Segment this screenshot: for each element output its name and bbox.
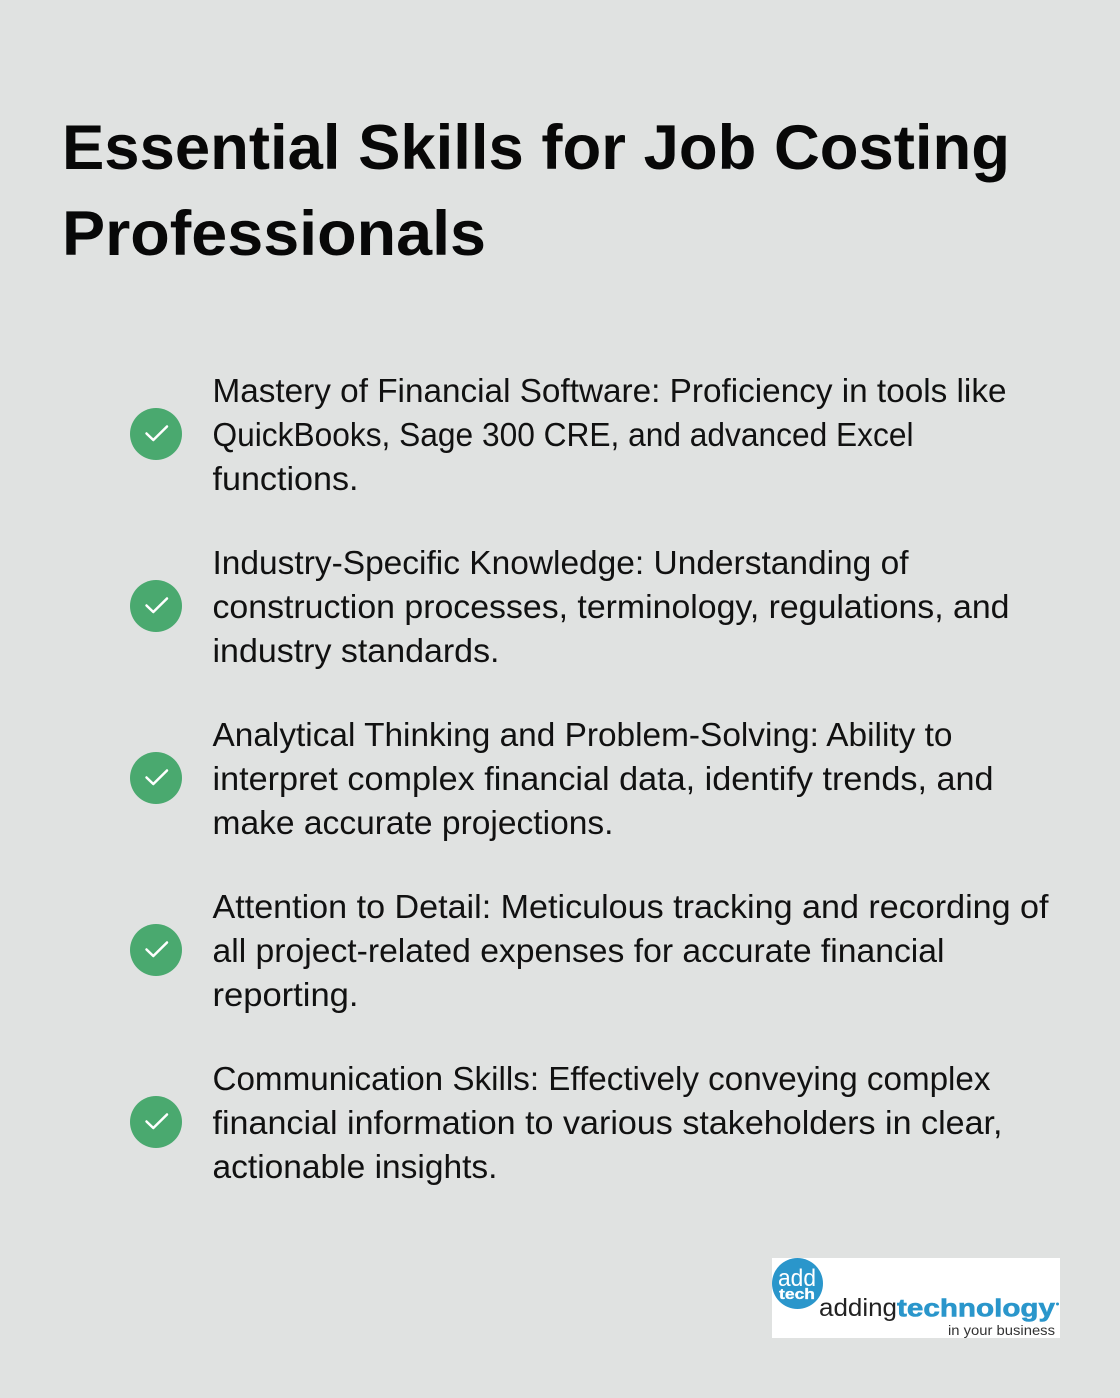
text: analytical thinking: make accurate projections. (212, 804, 614, 841)
logo: adding technology: in your business (948, 1322, 1055, 1338)
title: Essential Skills for Job Costing (62, 113, 1010, 183)
logo: adding technology: tech (779, 1286, 815, 1303)
icon: check badge (130, 924, 182, 976)
text: attention to detail (212, 888, 1049, 1013)
logo: adding technology: add (778, 1265, 816, 1292)
title (62, 113, 1010, 269)
skill item: attention to detail (130, 888, 1049, 1013)
logo: adding technology (772, 1258, 1060, 1338)
text: industry knowledge: Industry-Specific Knowledge: Understanding of (212, 544, 909, 581)
text: industry knowledge: construction processes, terminology, regulations, and (212, 588, 1010, 625)
skill item: financial software (130, 372, 1007, 497)
text: communication: actionable insights. (212, 1148, 498, 1185)
icon: check badge (130, 752, 182, 804)
icon: check badge (130, 408, 182, 460)
skill item: analytical thinking (130, 716, 994, 841)
text: communication: financial information to various stakeholders in clear, (212, 1104, 1002, 1141)
text: attention to detail: reporting. (212, 976, 358, 1013)
icon: check badge (130, 580, 182, 632)
text: financial software (212, 372, 1007, 497)
text: financial software: functions. (212, 460, 358, 497)
text: financial software: Mastery of Financial Software: Proficiency in tools like (212, 372, 1007, 409)
text: attention to detail: Attention to Detail: Meticulous tracking and recording of (212, 888, 1049, 925)
icon: check badge (130, 1096, 182, 1148)
logo: adding technology: technology (897, 1294, 1055, 1322)
title: Professionals (62, 199, 486, 269)
logo: adding technology: adding (819, 1294, 897, 1322)
text: analytical thinking: interpret complex financial data, identify trends, and (212, 760, 994, 797)
text: attention to detail: all project-related expenses for accurate financial (212, 932, 944, 969)
text: industry knowledge: industry standards. (212, 632, 500, 669)
skill item: communication (130, 1060, 1002, 1185)
text: communication: Communication Skills: Effectively conveying complex (212, 1060, 991, 1097)
text: communication (212, 1060, 1002, 1185)
text: financial software: QuickBooks, Sage 300 CRE, and advanced Excel (212, 416, 914, 453)
text: analytical thinking: Analytical Thinking and Problem-Solving: Ability to (212, 716, 952, 753)
text: analytical thinking (212, 716, 994, 841)
skill item: industry knowledge (130, 544, 1010, 669)
text: industry knowledge (212, 544, 1010, 669)
